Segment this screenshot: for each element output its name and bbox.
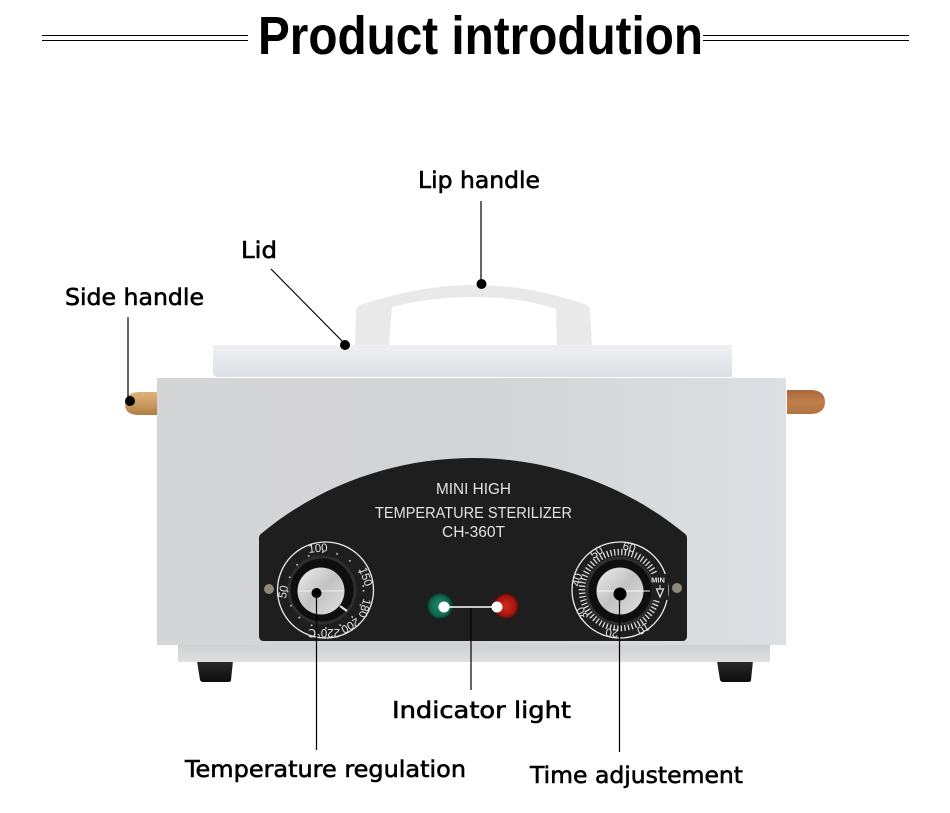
temperature dial: 180 [356,597,372,619]
sterilizer product illustration [125,285,825,682]
callout: lid: Lid [241,238,277,264]
icon: right wooden side handle [787,390,825,414]
callout: lip handle [418,168,540,289]
callout: side handle: Side handle [65,285,204,311]
temperature dial [277,542,374,638]
callout: indicator light: Indicator light [392,698,571,724]
time dial: 60 [621,541,637,555]
callout: side handle [65,285,204,406]
icon: lid top handle [355,285,592,345]
temperature dial: 200 [339,615,361,635]
icon: left foot [197,661,233,682]
callout: time adjustement: Time adjustement [529,763,743,789]
title: Product introdution [258,6,703,66]
icon: left screw [264,584,274,594]
time dial [571,541,668,639]
time dial: 30 [575,604,591,622]
indicator lights [427,593,519,619]
time dial: MIN [651,576,665,584]
callout: lid [241,238,350,350]
panel text: TEMPERATURE STERILIZER [375,505,572,522]
icon: right screw [672,583,682,593]
callout: time adjustement [529,588,743,789]
callout: temperature regulation [184,588,466,783]
panel text: MINI HIGH [436,481,511,498]
temperature dial: 50 [277,585,291,599]
icon: right foot [717,661,753,682]
temperature dial: 220℃ [308,626,340,638]
time dial: 50 [588,544,606,562]
panel text [375,481,572,541]
panel text: CH-360T [442,524,505,541]
callout: temperature regulation: Temperature regulation [184,757,466,783]
time dial: 20 [605,625,619,639]
temperature dial: 150 [356,566,374,588]
time dial: 40 [571,572,585,588]
time dial: 10 [634,620,652,636]
main body [157,378,786,645]
control panel [259,458,687,641]
icon: left wooden side handle [125,392,157,415]
lid [213,345,732,377]
temperature dial: 100 [308,542,328,556]
callout: indicator light [392,602,571,724]
callout: lip handle: Lip handle [418,168,540,194]
base plinth [178,645,770,662]
